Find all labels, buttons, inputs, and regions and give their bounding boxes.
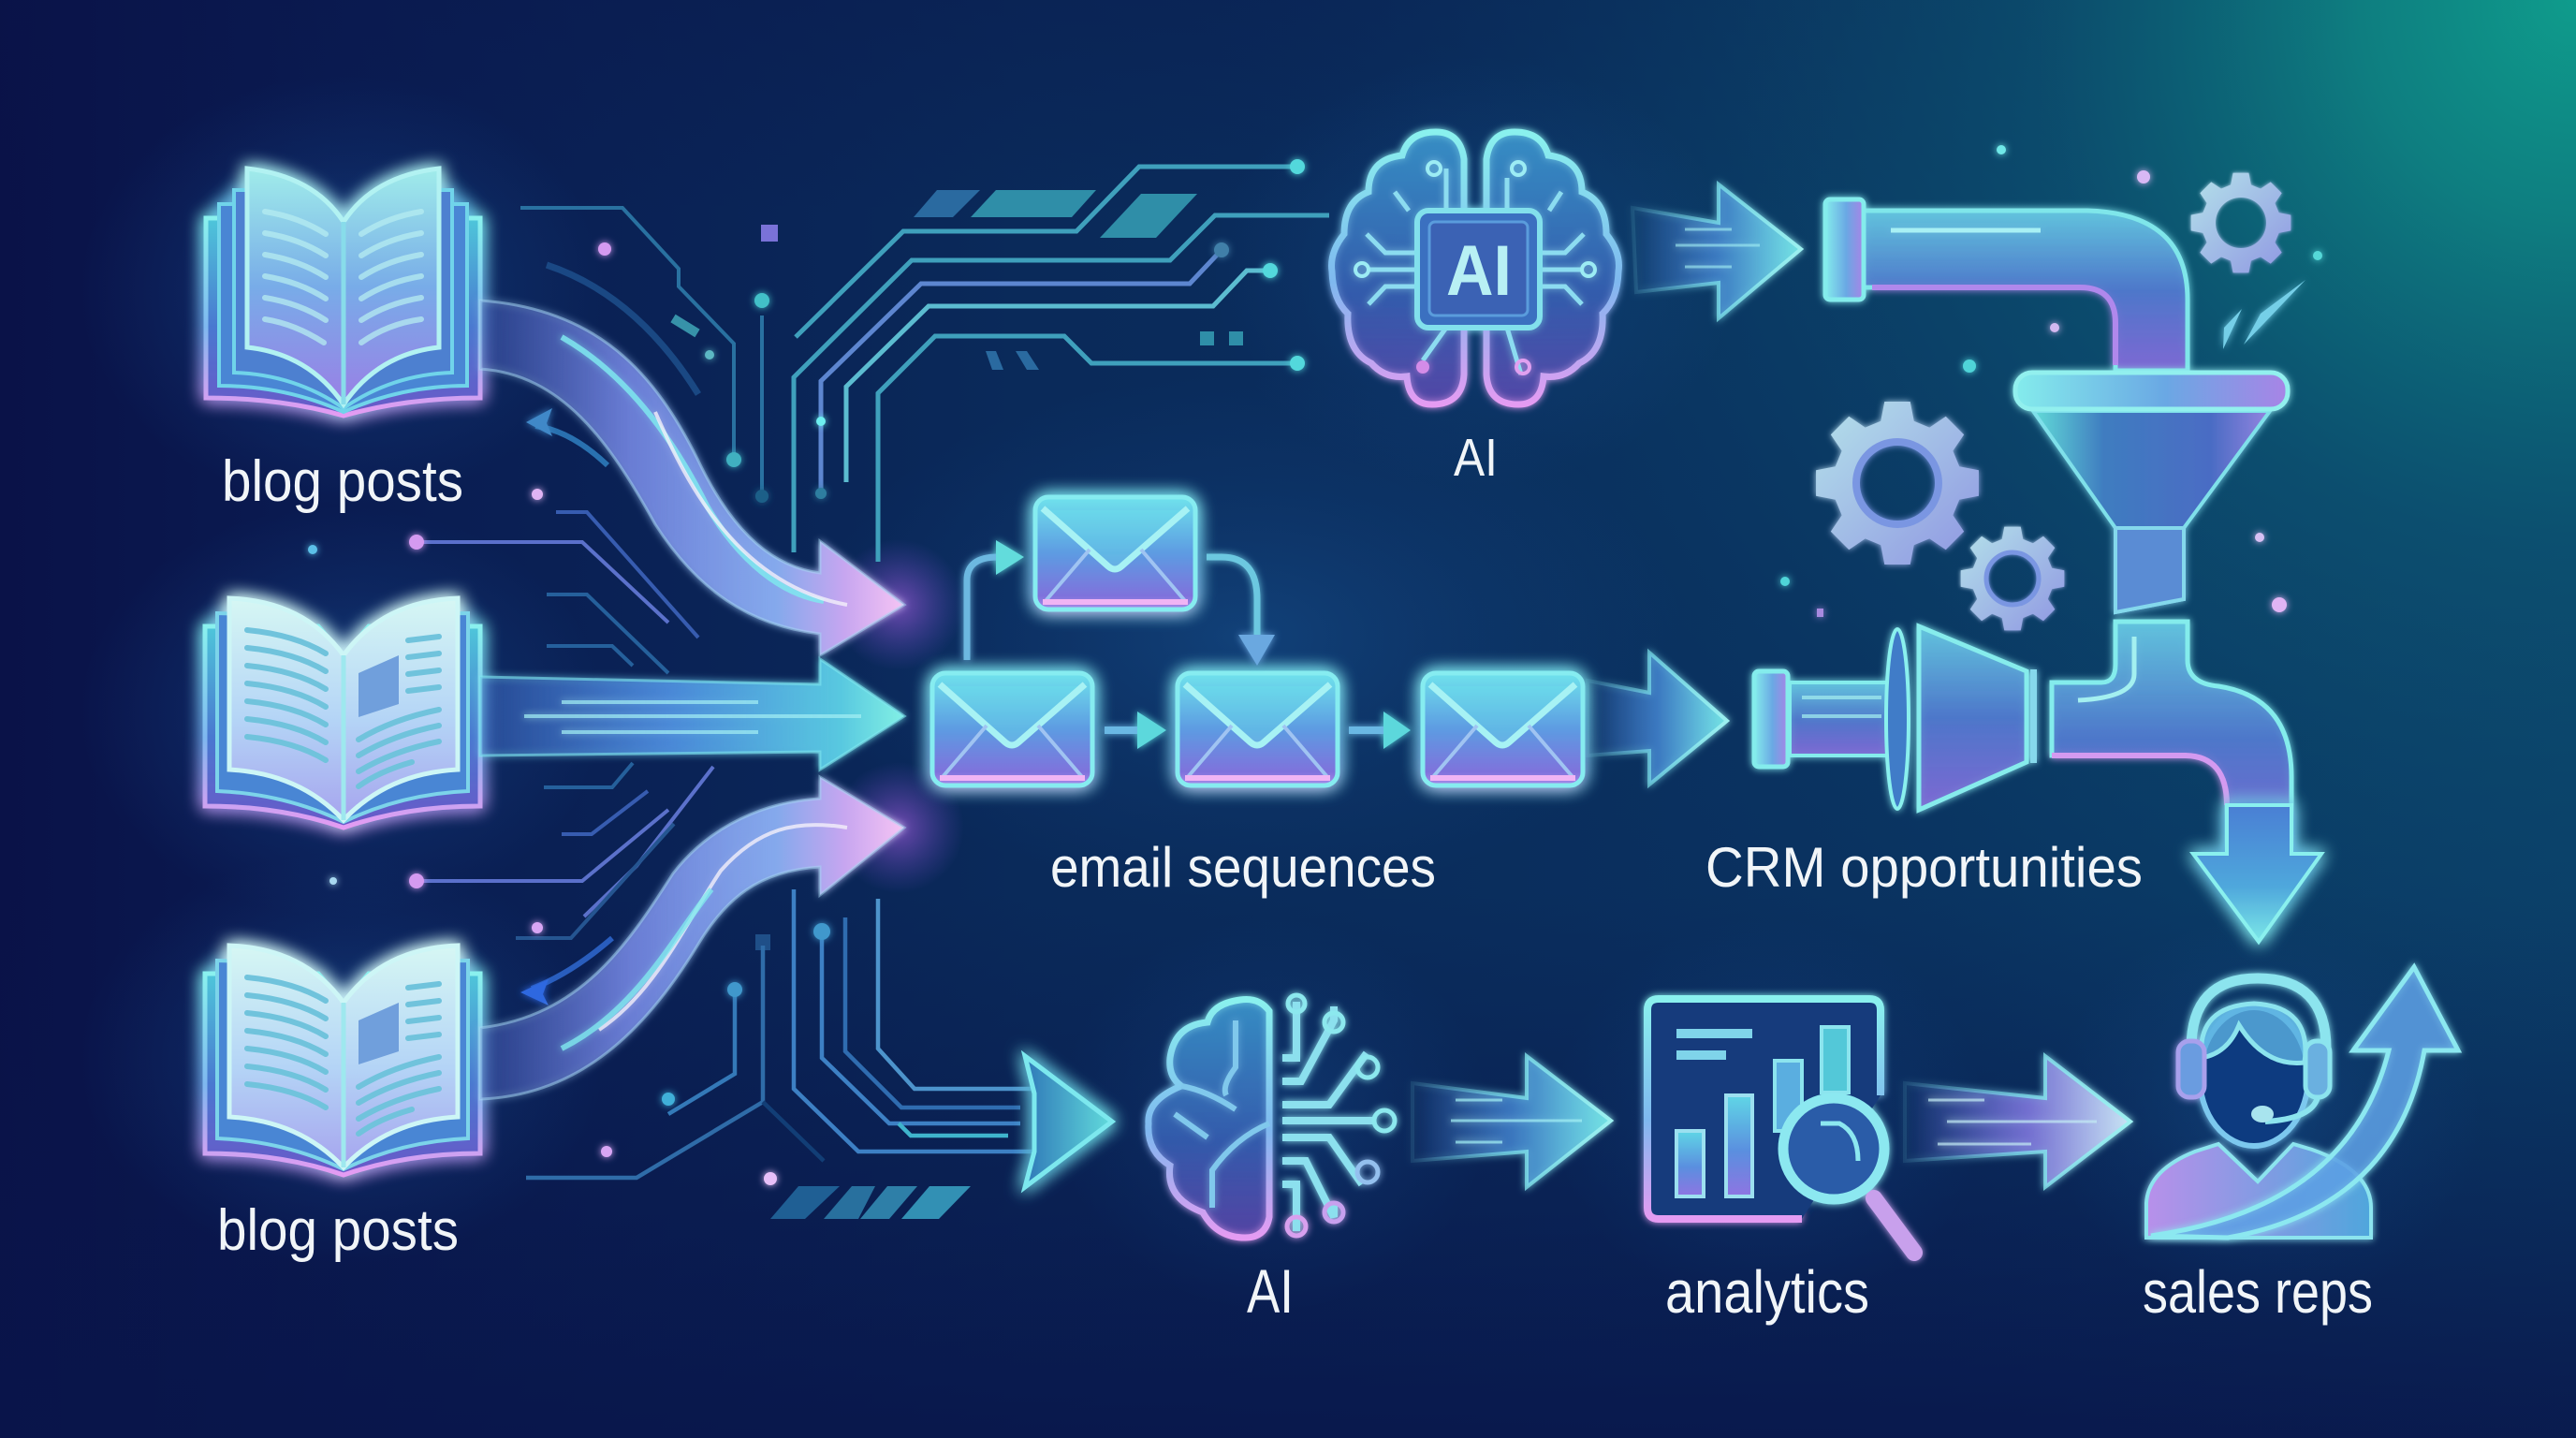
circuit traces: top left xyxy=(417,208,762,989)
circuit traces: lower main xyxy=(526,889,1032,1178)
flow arrow: middle book to emails xyxy=(480,659,904,770)
lower pipe: CRM xyxy=(1754,622,2291,857)
crystal shards xyxy=(2223,280,2305,349)
flow arrow: bottom book to emails xyxy=(480,777,904,1099)
upper pipe xyxy=(1825,199,2188,371)
arrow: first to top envelope xyxy=(967,540,1024,660)
brain: top AI: AI xyxy=(1446,231,1512,311)
flange xyxy=(1825,199,1864,300)
label: CRM opportunities: CRM opportunities xyxy=(1705,836,2143,899)
pipe segment xyxy=(1790,682,1887,756)
analytics dashboard xyxy=(1647,999,1914,1253)
growth arrow xyxy=(2151,967,2458,1238)
circuit decorative blocks xyxy=(755,190,1243,1219)
label: AI bottom: AI xyxy=(1247,1256,1294,1326)
magnifier xyxy=(1874,1198,1914,1253)
gear: top right xyxy=(2191,173,2291,272)
label: email sequences: email sequences xyxy=(1050,836,1436,899)
funnel xyxy=(2015,373,2288,612)
book: middle left xyxy=(205,598,480,828)
arrow: lower circuits to brain xyxy=(1025,1056,1112,1187)
elbow xyxy=(1864,211,2188,371)
arrow: first to second envelope xyxy=(1105,712,1166,749)
funnel rim xyxy=(2015,373,2288,409)
circuit nodes and particles xyxy=(308,145,2322,1185)
bars xyxy=(1676,1034,1752,1055)
pipe disc xyxy=(1886,629,1909,809)
pipe cone xyxy=(1919,626,2027,810)
arrow: pipe down to sales reps xyxy=(2193,805,2321,942)
label: sales reps: sales reps xyxy=(2143,1258,2373,1326)
head xyxy=(2200,1007,2308,1146)
email sequence xyxy=(932,497,1583,785)
brain: bottom AI xyxy=(1149,995,1395,1238)
gear: large xyxy=(1816,402,1979,565)
arrow: second to third envelope xyxy=(1349,712,1411,749)
label: AI top: AI xyxy=(1454,428,1498,488)
sales rep person xyxy=(2146,978,2371,1238)
book: bottom left xyxy=(205,946,480,1175)
label: analytics: analytics xyxy=(1665,1258,1869,1326)
label: blog posts bottom: blog posts xyxy=(217,1198,459,1263)
envelope: second xyxy=(1178,673,1338,785)
arrow: emails to CRM xyxy=(1588,653,1727,785)
envelope: first xyxy=(932,673,1092,785)
arrow: AI to analytics xyxy=(1412,1056,1611,1187)
book: top left xyxy=(206,169,480,416)
brain circuits xyxy=(1367,169,1584,374)
brain circuits xyxy=(1282,1002,1376,1231)
gear: small xyxy=(1961,527,2064,630)
circuit traces: upper main xyxy=(794,167,1329,562)
arrow: top to second envelope xyxy=(1207,557,1275,666)
label: blog posts top: blog posts xyxy=(222,449,463,514)
arrow: brain to upper pipe xyxy=(1632,184,1801,318)
AI chip xyxy=(1417,211,1540,328)
brain: top AI xyxy=(1332,132,1618,404)
torso xyxy=(2146,1144,2371,1238)
T pipe to down arrow xyxy=(2052,622,2291,857)
headset xyxy=(2191,978,2326,1049)
arrow: analytics to sales reps xyxy=(1905,1056,2130,1187)
envelope: top xyxy=(1035,497,1195,609)
flow arrow: top book to emails xyxy=(480,301,904,655)
envelope: third xyxy=(1423,673,1583,785)
pipe flange xyxy=(1754,671,1788,767)
